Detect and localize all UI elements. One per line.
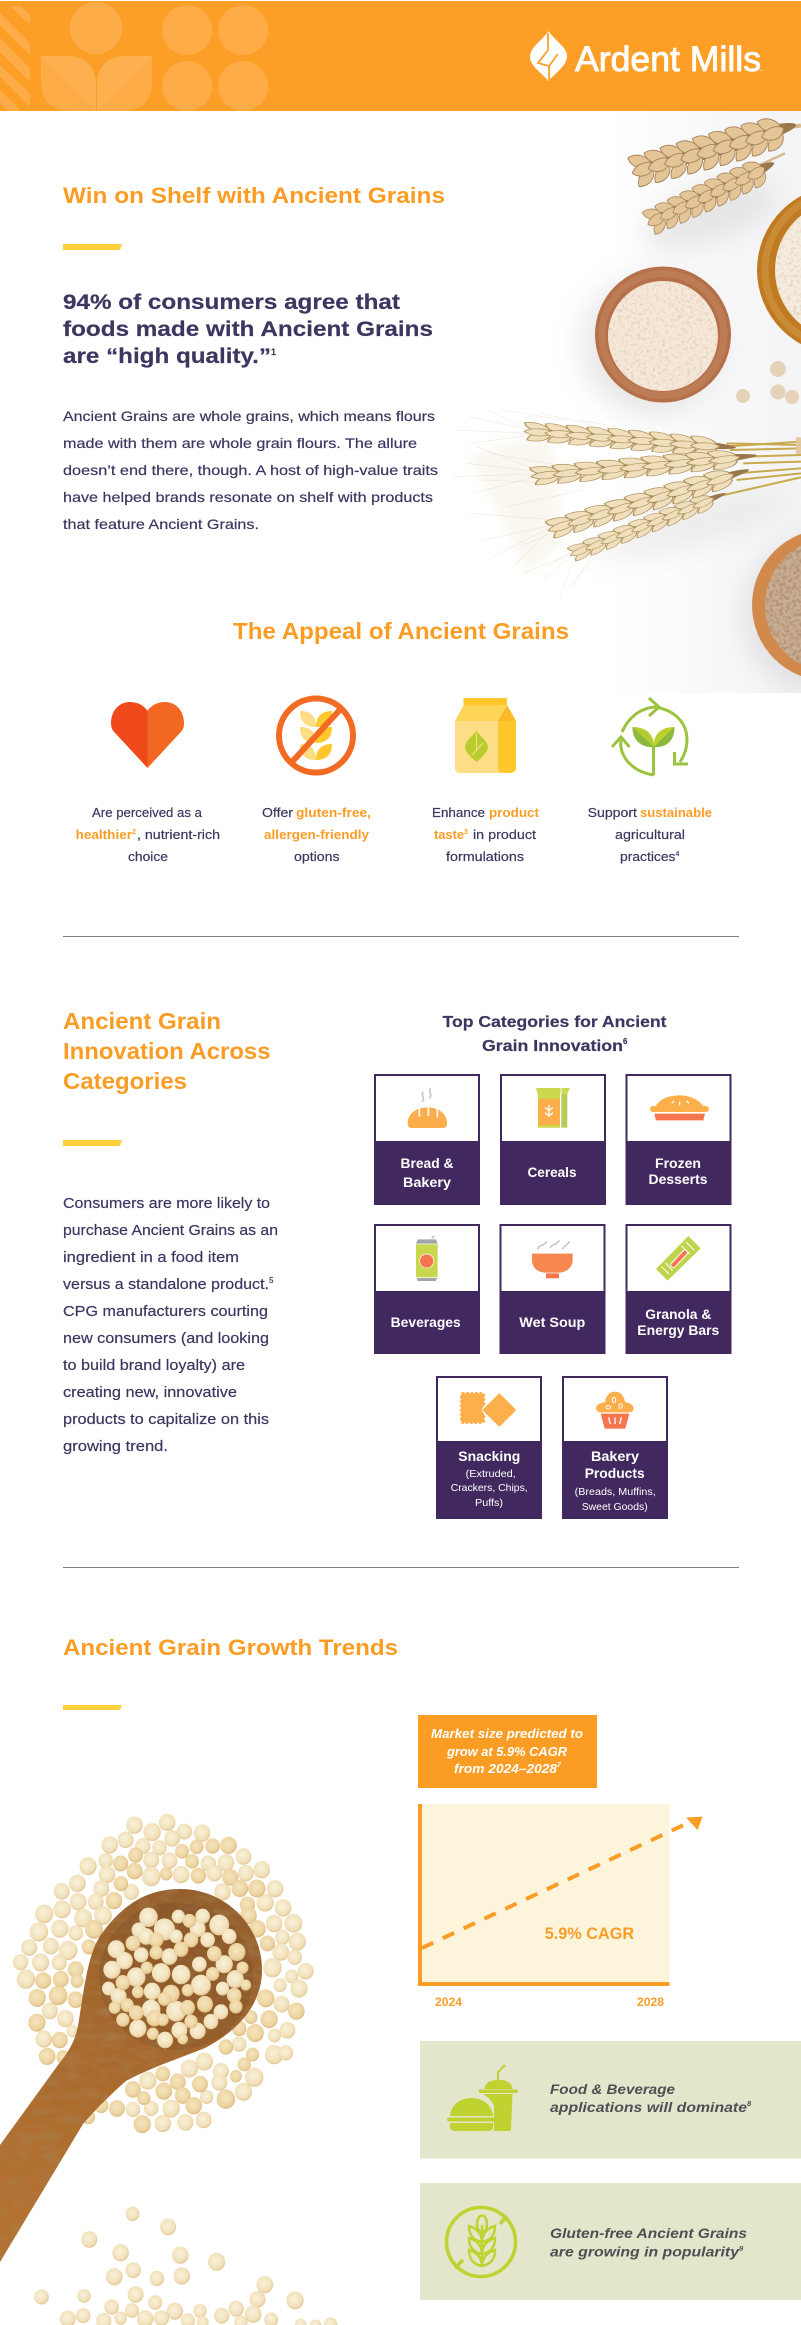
card: Beverages — [374, 1224, 480, 1354]
subheading: 94% stat: are “high quality.” — [63, 344, 271, 368]
icon: burger and cup — [447, 2065, 518, 2131]
panel: food and beverage: Food & Beverage — [550, 2081, 675, 2097]
card: Granola & Energy Bars: Granola & — [645, 1307, 712, 1322]
caption: product taste: in product — [473, 827, 536, 842]
subheading: 94% stat: foods made with Ancient Grains — [63, 317, 433, 341]
panel: food and beverage — [420, 2041, 801, 2158]
accent bar — [63, 1140, 122, 1146]
paragraph: consumers: products to capitalize on this — [63, 1411, 269, 1428]
callout: market size: 7 — [557, 1762, 562, 1769]
heading: Innovation Across Categories: Ancient Grain — [63, 1008, 221, 1034]
icon: pie — [650, 1095, 709, 1120]
icon: flour bag — [455, 698, 516, 773]
card: Snacking: Puffs) — [475, 1497, 503, 1509]
panel: gluten-free: are growing in popularity — [550, 2244, 740, 2260]
card: Cereals: Cereals — [528, 1165, 576, 1180]
callout: market size: Market size predicted to — [431, 1726, 583, 1741]
card: Frozen Desserts: Frozen — [655, 1156, 701, 1171]
panel: gluten-free: 9 — [739, 2244, 744, 2253]
header pattern — [0, 2, 268, 111]
loose grains — [736, 361, 799, 404]
photo: wheat and grain bowls — [450, 106, 801, 693]
paragraph: consumers: growing trend. — [63, 1438, 168, 1455]
panel: food and beverage: applications will dominate — [550, 2099, 747, 2115]
caption: sustainable — [588, 805, 712, 864]
bowl: flour, centre — [595, 266, 731, 402]
callout: market size: grow at 5.9% CAGR — [446, 1744, 568, 1759]
intro paragraph: have helped brands resonate on shelf with products — [63, 489, 433, 505]
icon: cereal box — [536, 1088, 570, 1128]
card: Beverages: Beverages — [391, 1315, 461, 1330]
caption: healthier: 2 — [132, 829, 136, 836]
caption: healthier — [76, 805, 220, 864]
card: Snacking: Crackers, Chips, — [451, 1482, 528, 1494]
paragraph: consumers: ingredient in a food item — [63, 1249, 239, 1266]
chart: CAGR growth — [418, 1804, 703, 2009]
icon: energy bar — [656, 1236, 701, 1281]
seeds: scattered — [34, 2207, 337, 2325]
icon: heart — [111, 702, 184, 768]
card: Bakery Products: (Breads, Muffins, — [575, 1486, 656, 1498]
caption: product taste: formulations — [446, 849, 525, 864]
wooden spoon — [0, 1889, 262, 2262]
subheading: 94% stat: 94% of consumers agree that — [63, 290, 400, 314]
header banner — [0, 1, 801, 111]
chart: CAGR growth: 2028 — [637, 1995, 664, 2009]
caption: sustainable: 4 — [676, 851, 680, 858]
caption: product taste: 3 — [464, 829, 468, 836]
card: Bakery Products: Sweet Goods) — [582, 1501, 648, 1513]
intro paragraph: doesn’t end there, though. A host of high-value traits — [63, 462, 438, 478]
icon: gluten-free wheat — [279, 698, 353, 772]
icon: soup bowl — [532, 1240, 573, 1278]
panel: gluten-free — [420, 2183, 801, 2300]
heading: Top Categories: Grain Innovation — [482, 1038, 623, 1055]
icon: sustainable sprout — [612, 698, 688, 775]
photo: sorghum and wooden spoon — [0, 1814, 337, 2325]
card: Snacking: (Extruded, — [466, 1468, 516, 1480]
callout: market size — [418, 1715, 597, 1788]
paragraph: consumers: 5 — [269, 1276, 274, 1285]
card: Snacking — [436, 1376, 542, 1519]
caption: sustainable: practices — [620, 849, 676, 864]
chart: CAGR growth: 5.9% CAGR — [545, 1924, 634, 1943]
intro paragraph: made with them are whole grain flours. The allure — [63, 435, 417, 451]
icon: bread — [408, 1088, 447, 1128]
icon: can — [416, 1236, 438, 1281]
caption: product taste: taste — [434, 827, 464, 842]
card: Wet Soup: Wet Soup — [519, 1315, 585, 1330]
accent bar — [63, 244, 122, 250]
card: Snacking: Snacking — [458, 1448, 520, 1464]
caption: gluten-free — [262, 805, 371, 864]
paragraph: consumers: Consumers are more likely to — [63, 1195, 270, 1212]
arrow: growth trend — [422, 1817, 703, 1948]
card: Frozen Desserts: Desserts — [648, 1172, 708, 1187]
wheat bunch, lower — [453, 410, 801, 597]
card: Granola & Energy Bars — [626, 1224, 732, 1354]
heading: Growth Trends: Ancient Grain Growth Trends — [63, 1635, 398, 1660]
paragraph: consumers: CPG manufacturers courting — [63, 1303, 268, 1320]
title: Win on Shelf: Win on Shelf with Ancient Grains — [63, 183, 445, 208]
caption: healthier: choice — [128, 849, 168, 864]
icon: gluten-free wheat outline — [446, 2208, 516, 2276]
caption: sustainable: Support — [588, 805, 637, 820]
caption: sustainable: agricultural — [615, 827, 685, 842]
seeds in spoon — [99, 1903, 253, 2050]
card: Granola & Energy Bars: Energy Bars — [637, 1323, 719, 1338]
paragraph: consumers — [63, 1195, 278, 1455]
heading: Innovation Across Categories — [63, 1008, 270, 1094]
icon: crackers — [461, 1393, 516, 1427]
caption: gluten-free: allergen-friendly — [264, 827, 370, 842]
heading: The Appeal of Ancient Grains: The Appeal of Ancient Grains — [233, 618, 569, 644]
seeds: outer pile — [13, 1814, 314, 2132]
caption: healthier: , nutrient-rich — [137, 827, 220, 842]
heading: Innovation Across Categories: Innovation Across — [63, 1038, 270, 1064]
card: Bakery Products: Bakery — [591, 1448, 639, 1464]
accent bar — [63, 1705, 122, 1710]
logo: Ardent Mills — [530, 31, 763, 81]
bowl: wheat flakes, lower right — [752, 529, 801, 681]
card: Bakery Products — [562, 1376, 668, 1519]
heading: Top Categories: Top Categories for Ancient — [442, 1014, 667, 1031]
caption: gluten-free: gluten-free, — [296, 805, 371, 820]
icon: muffin — [596, 1392, 634, 1429]
caption: gluten-free: Offer — [262, 805, 294, 820]
paragraph: consumers: new consumers (and looking — [63, 1330, 269, 1347]
card: Bread & Bakery: Bread & — [400, 1156, 454, 1171]
caption: healthier: Are perceived as a — [92, 805, 203, 820]
chart: CAGR growth: 2024 — [435, 1995, 462, 2009]
caption: gluten-free: options — [294, 849, 340, 864]
callout: market size: from 2024–2028 — [454, 1761, 558, 1776]
panel: gluten-free: Gluten-free Ancient Grains — [550, 2225, 747, 2241]
card: Cereals — [500, 1074, 606, 1205]
logo: Ardent Mills: . — [760, 63, 763, 74]
subheading: 94% stat — [63, 290, 433, 368]
subheading: 94% stat: 1 — [271, 347, 276, 357]
paragraph: consumers: creating new, innovative — [63, 1384, 237, 1401]
caption: product taste — [432, 805, 540, 864]
panel: food and beverage: 8 — [747, 2099, 752, 2108]
intro paragraph — [63, 408, 438, 532]
intro paragraph: that feature Ancient Grains. — [63, 516, 259, 532]
wheat ears, top — [623, 106, 801, 241]
card: Bakery Products: Products — [585, 1465, 645, 1481]
bowl: flour, right edge — [757, 196, 801, 344]
caption: sustainable: sustainable — [640, 805, 712, 820]
heading: Innovation Across Categories: Categories — [63, 1068, 187, 1094]
paragraph: consumers: versus a standalone product. — [63, 1276, 269, 1293]
card: Wet Soup — [500, 1224, 606, 1354]
intro paragraph: Ancient Grains are whole grains, which means flours — [63, 408, 435, 424]
card: Frozen Desserts — [626, 1074, 732, 1205]
card: Bread & Bakery — [374, 1074, 480, 1205]
paragraph: consumers: purchase Ancient Grains as an — [63, 1222, 278, 1239]
card: Bread & Bakery: Bakery — [403, 1175, 452, 1190]
heading: Top Categories — [442, 1014, 667, 1055]
heading: Top Categories: 6 — [623, 1037, 628, 1046]
caption: healthier: healthier — [76, 827, 132, 842]
logo: Ardent Mills: Ardent Mills — [575, 40, 761, 79]
paragraph: consumers: to build brand loyalty) are — [63, 1357, 245, 1374]
caption: product taste: Enhance — [432, 805, 485, 820]
caption: product taste: product — [489, 805, 540, 820]
